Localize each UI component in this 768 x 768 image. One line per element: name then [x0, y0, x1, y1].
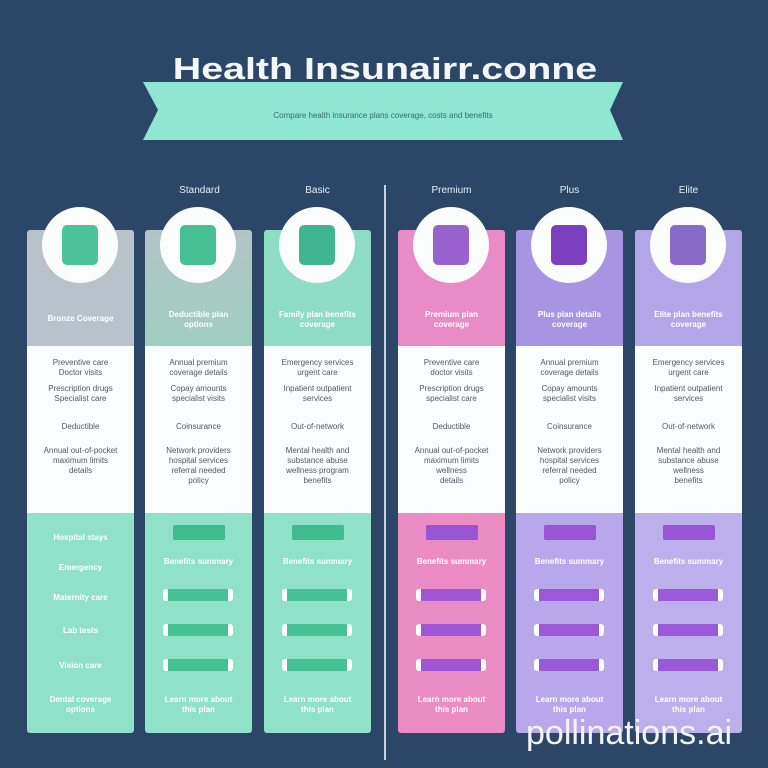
- panel: plan 6: this plan: [672, 705, 705, 714]
- divider: [384, 185, 386, 760]
- panel: plan 3: Emergency services: [281, 358, 354, 367]
- panel: plan 4: Preventive care: [424, 358, 479, 367]
- panel: plan 3: Mental health and: [286, 446, 349, 455]
- panel: plan 2: specialist visits: [172, 394, 225, 403]
- panel: plan 3: this plan: [301, 705, 334, 714]
- panel: plan 5: Benefits summary: [535, 557, 604, 566]
- panel: plan 5: policy: [559, 476, 580, 485]
- panel: plan 6: Inpatient outpatient: [654, 384, 723, 393]
- panel: plan 2: hospital services: [169, 456, 228, 465]
- subtitle: Compare health insurance plans coverage, costs and benefits: [273, 111, 493, 120]
- panel: plan 4: coverage: [434, 320, 469, 329]
- column labels: Plus: [560, 185, 579, 196]
- panel: plan 2: [145, 230, 252, 733]
- panel: plan 3: coverage: [300, 320, 335, 329]
- panel: plan 1: Doctor visits: [59, 368, 102, 377]
- panel: plan 1: Hospital stays: [53, 533, 108, 542]
- icon: plan 6: [650, 207, 726, 283]
- panel: plan 5: referral needed: [542, 466, 597, 475]
- panel: plan 1: Bronze Coverage: [48, 314, 113, 323]
- panel: plan 2: Coinsurance: [176, 422, 221, 431]
- panel: plan 3: Benefits summary: [283, 557, 352, 566]
- panel: plan 1: options: [66, 705, 95, 714]
- icon: plan 4: [413, 207, 489, 283]
- title: Health Insunairr.conne: [173, 51, 597, 86]
- panel: plan 1: maximum limits: [53, 456, 108, 465]
- panel: plan 2: Learn more about: [165, 695, 232, 704]
- panel: plan 4: Learn more about: [418, 695, 485, 704]
- panel: plan 6: Out-of-network: [662, 422, 715, 431]
- panel: plan 1: Emergency: [59, 563, 102, 572]
- panel: plan 6: Emergency services: [652, 358, 725, 367]
- icon: plan 3: [279, 207, 355, 283]
- panel: plan 2: Copay amounts: [170, 384, 227, 393]
- panel: plan 3: benefits: [303, 476, 332, 485]
- panel: plan 6: urgent care: [668, 368, 709, 377]
- panel: plan 5: Plus plan details: [538, 310, 601, 319]
- icon: plan 2: [160, 207, 236, 283]
- column labels: Standard: [179, 185, 220, 196]
- icon: plan 1: [42, 207, 118, 283]
- panel: plan 6: services: [674, 394, 703, 403]
- panel: plan 2: Network providers: [166, 446, 231, 455]
- panel: plan 1: Dental coverage: [50, 695, 111, 704]
- panel: plan 4: Benefits summary: [417, 557, 486, 566]
- panel: plan 1: details: [69, 466, 92, 475]
- panel: plan 5: [516, 230, 623, 733]
- panel: plan 4: details: [440, 476, 463, 485]
- panel: plan 3: Inpatient outpatient: [283, 384, 352, 393]
- panel: plan 5: this plan: [553, 705, 586, 714]
- panel: plan 4: Premium plan: [425, 310, 478, 319]
- panel: plan 5: Annual premium: [540, 358, 599, 367]
- panel: plan 6: coverage: [671, 320, 706, 329]
- panel: plan 2: coverage details: [169, 368, 228, 377]
- panel: plan 1: Specialist care: [54, 394, 107, 403]
- panel: plan 6: substance abuse: [658, 456, 719, 465]
- panel: plan 3: Family plan benefits: [279, 310, 356, 319]
- panel: plan 2: policy: [188, 476, 209, 485]
- panel: plan 3: urgent care: [297, 368, 338, 377]
- panel: plan 2: referral needed: [171, 466, 226, 475]
- panel: plan 3: wellness program: [286, 466, 349, 475]
- panel: plan 3: services: [303, 394, 332, 403]
- panel: plan 1: [27, 230, 134, 733]
- panel: plan 4: Annual out-of-pocket: [415, 446, 488, 455]
- panel: plan 5: specialist visits: [543, 394, 596, 403]
- panel: plan 4: maximum limits: [424, 456, 479, 465]
- panel: plan 5: coverage details: [540, 368, 599, 377]
- panel: plan 1: Lab tests: [63, 626, 98, 635]
- panel: plan 6: Mental health and: [657, 446, 720, 455]
- panel: plan 2: options: [184, 320, 213, 329]
- panel: plan 3: [264, 230, 371, 733]
- ribbon banner: [143, 82, 623, 140]
- panel: plan 5: Network providers: [537, 446, 602, 455]
- panel: plan 4: Deductible: [433, 422, 470, 431]
- panel: plan 6: Benefits summary: [654, 557, 723, 566]
- panel: plan 6: Elite plan benefits: [654, 310, 723, 319]
- panel: plan 2: Deductible plan: [169, 310, 228, 319]
- column labels: Premium: [431, 185, 472, 196]
- panel: plan 1: Preventive care: [53, 358, 108, 367]
- column labels: Basic: [305, 185, 330, 196]
- panel: plan 5: coverage: [552, 320, 587, 329]
- panel: plan 3: substance abuse: [287, 456, 348, 465]
- panel: plan 1: Prescription drugs: [48, 384, 113, 393]
- panel: plan 3: Learn more about: [284, 695, 351, 704]
- panel: plan 6: [635, 230, 742, 733]
- panel: plan 6: Learn more about: [655, 695, 722, 704]
- watermark: pollinations.ai: [526, 714, 732, 752]
- panel: plan 2: Benefits summary: [164, 557, 233, 566]
- panel: plan 4: this plan: [435, 705, 468, 714]
- panel: plan 5: Coinsurance: [547, 422, 592, 431]
- icon: plan 5: [531, 207, 607, 283]
- panel: plan 6: wellness: [673, 466, 704, 475]
- panel: plan 4: wellness: [436, 466, 467, 475]
- panel: plan 3: Out-of-network: [291, 422, 344, 431]
- panel: plan 5: Learn more about: [536, 695, 603, 704]
- panel: plan 5: hospital services: [540, 456, 599, 465]
- panel: plan 2: this plan: [182, 705, 215, 714]
- panel: plan 1: Maternity care: [53, 593, 108, 602]
- panel: plan 5: Copay amounts: [541, 384, 598, 393]
- panel: plan 6: benefits: [674, 476, 703, 485]
- panel: plan 1: Annual out-of-pocket: [44, 446, 117, 455]
- column labels: [179, 185, 698, 196]
- panel: plan 2: Annual premium: [169, 358, 228, 367]
- panel: plan 4: doctor visits: [430, 368, 473, 377]
- panel: plan 1: Deductible: [62, 422, 99, 431]
- panel: plan 1: Vision care: [59, 661, 102, 670]
- panel: plan 4: Prescription drugs: [419, 384, 484, 393]
- column labels: Elite: [679, 185, 698, 196]
- panel: plan 4: [398, 230, 505, 733]
- panel: plan 4: specialist care: [426, 394, 477, 403]
